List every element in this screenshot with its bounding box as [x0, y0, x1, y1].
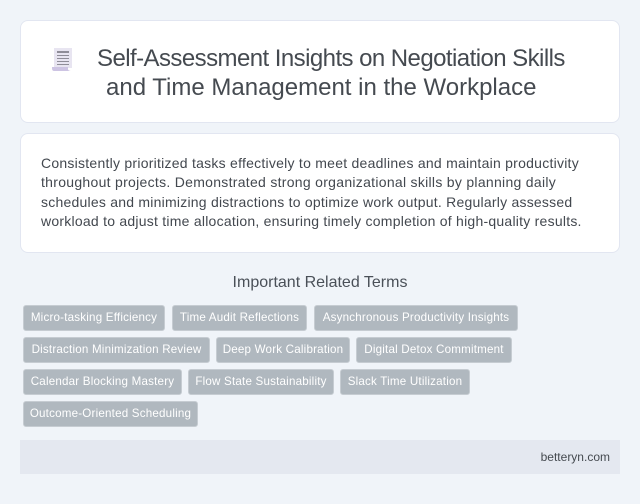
tag: Time Audit Reflections: [180, 311, 299, 324]
panel: summary text: [20, 133, 620, 253]
tag: [23, 305, 165, 331]
summary paragraph: [41, 155, 582, 229]
tag: [23, 337, 210, 363]
summary paragraph: workload to adjust time allocation, ensuring timely completion of high-quality results.: [41, 213, 582, 229]
footer bar: [20, 440, 620, 474]
tag: Calendar Blocking Mastery: [31, 375, 174, 388]
tag: [23, 401, 198, 427]
tag: Digital Detox Commitment: [364, 343, 504, 356]
tag: [356, 337, 512, 363]
icon: document scroll: [52, 48, 72, 71]
tag: Asynchronous Productivity Insights: [323, 311, 509, 324]
panel: title card: [20, 20, 620, 123]
title: [97, 45, 565, 101]
summary paragraph: schedules and minimizing distractions to optimize work output. Regularly assessed: [41, 194, 572, 210]
tag: Slack Time Utilization: [348, 375, 462, 388]
tag: Deep Work Calibration: [223, 343, 343, 356]
tag: Outcome-Oriented Scheduling: [30, 407, 191, 420]
tag: [340, 369, 470, 395]
tag list: [23, 305, 518, 427]
tag: [188, 369, 334, 395]
title: and Time Management in the Workplace: [106, 74, 536, 101]
summary paragraph: throughout projects. Demonstrated strong organizational skills by planning daily: [41, 174, 556, 190]
heading: related terms: Important Related Terms: [233, 274, 407, 291]
summary paragraph: Consistently prioritized tasks effectively to meet deadlines and maintain productivity: [41, 155, 579, 171]
tag: [23, 369, 182, 395]
tag: Flow State Sustainability: [195, 375, 327, 388]
title: Self-Assessment Insights on Negotiation Skills: [97, 45, 565, 72]
footer credit: betteryn.com: [541, 450, 610, 464]
tag: Distraction Minimization Review: [32, 343, 201, 356]
tag: [314, 305, 518, 331]
tag: Micro-tasking Efficiency: [31, 311, 157, 324]
tag: [216, 337, 350, 363]
tag: [172, 305, 307, 331]
